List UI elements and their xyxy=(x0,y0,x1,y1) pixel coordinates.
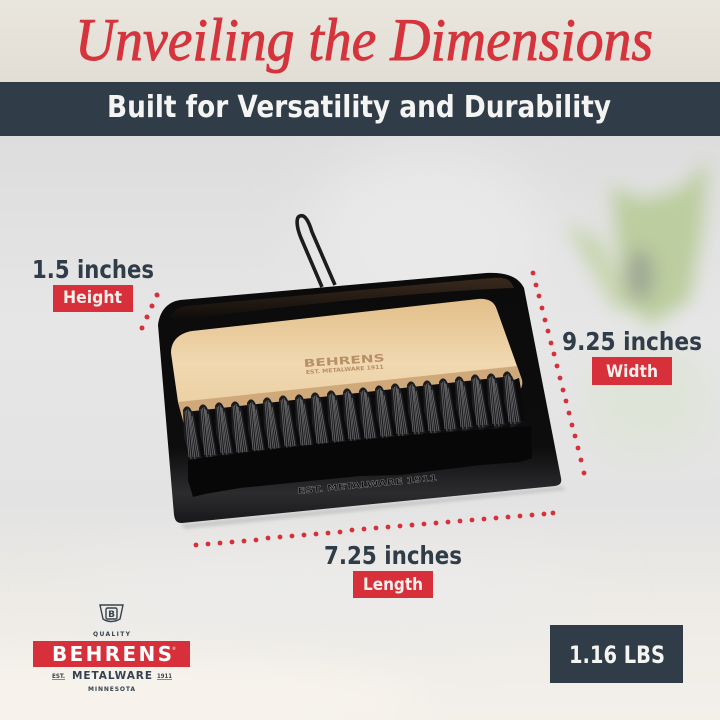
pan shadow xyxy=(180,486,566,529)
height label: 1.5 inches xyxy=(32,255,154,284)
weight badge: 1.16 LBS xyxy=(569,641,665,669)
blurred plant xyxy=(565,160,708,325)
brush logo xyxy=(303,352,385,376)
length label: 7.25 inches xyxy=(324,541,462,570)
height dotted line xyxy=(140,292,160,330)
Behrens logo: BEHRENS xyxy=(52,642,172,666)
dustpan xyxy=(158,273,561,523)
subtitle band xyxy=(0,82,720,136)
pan inner rim xyxy=(168,278,514,322)
header band xyxy=(0,0,720,82)
product: dustpan and brush xyxy=(158,216,566,529)
pan stamped logo: EST. METALWARE 1911 xyxy=(297,474,438,497)
brush logo: EST. METALWARE 1911 xyxy=(306,365,384,376)
title: Unveiling the Dimensions xyxy=(75,7,653,73)
wooden brush back xyxy=(171,299,522,428)
length tag: Length xyxy=(363,575,423,595)
Behrens logo: EST. xyxy=(52,673,65,680)
width tag: Width xyxy=(606,362,658,382)
height tag: Height xyxy=(63,288,122,308)
width label: 9.25 inches xyxy=(562,327,702,356)
icon: bucket badge: B xyxy=(108,610,115,620)
length dotted line xyxy=(194,511,555,547)
width label xyxy=(562,327,702,385)
wood lower ledge xyxy=(178,366,522,428)
icon: bucket badge xyxy=(100,605,123,622)
length label xyxy=(324,541,462,598)
Behrens logo xyxy=(33,605,190,693)
subtitle: Built for Versatility and Durability xyxy=(107,90,611,125)
bristles upper xyxy=(183,371,531,463)
Behrens logo: QUALITY xyxy=(93,631,131,638)
height label xyxy=(32,255,154,312)
width dotted line xyxy=(531,271,586,475)
weight badge xyxy=(550,625,683,683)
bristles dense lower xyxy=(188,426,532,497)
Behrens logo: 1911 xyxy=(157,673,172,680)
Behrens logo: METALWARE xyxy=(72,670,152,682)
Behrens logo: ® xyxy=(172,646,176,651)
hanging loop xyxy=(297,216,335,287)
brush logo: BEHRENS xyxy=(303,352,385,370)
Behrens logo: MINNESOTA xyxy=(88,686,135,693)
